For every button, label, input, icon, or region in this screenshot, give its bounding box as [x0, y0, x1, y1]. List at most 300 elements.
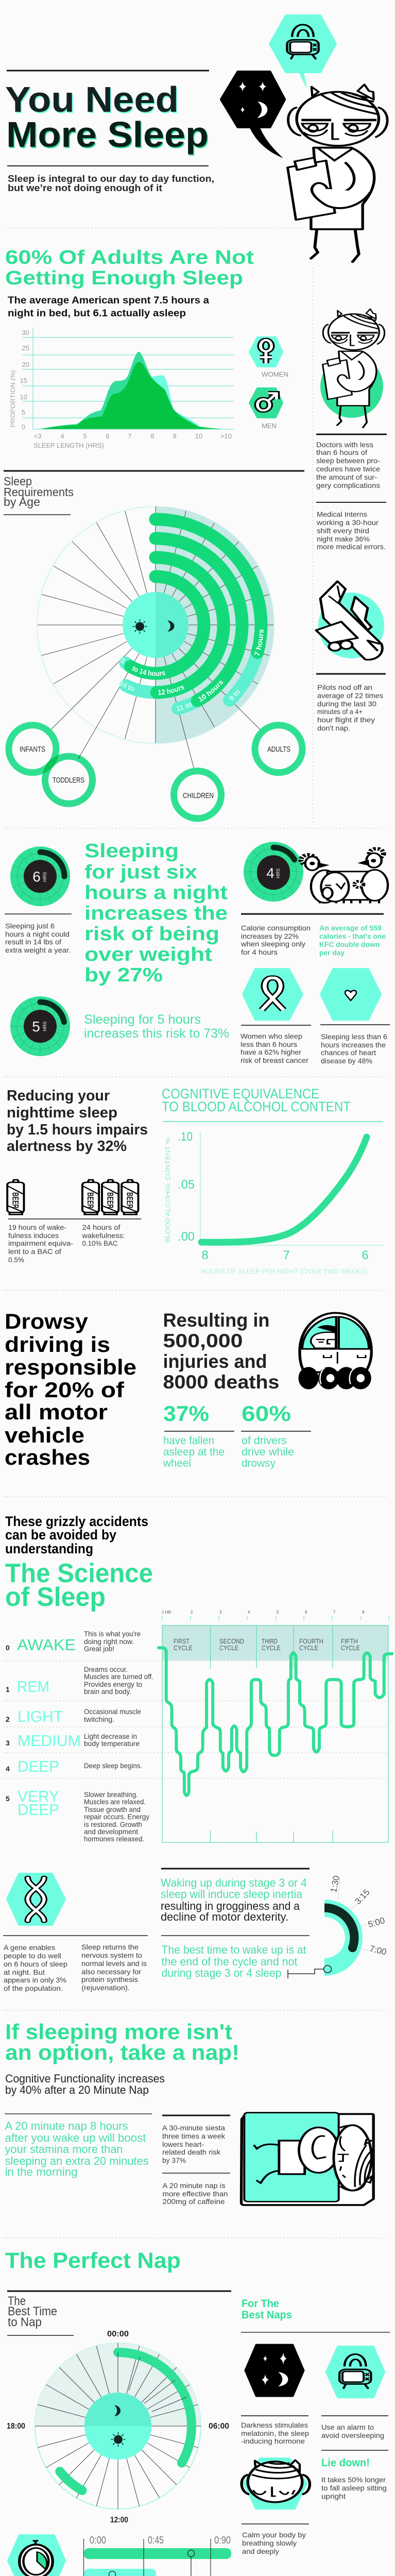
stage: very deep: 5	[6, 1794, 10, 1803]
text: nervous system: nervous system to	[81, 1951, 142, 1959]
bar labels: hours	[117, 630, 264, 711]
text: 20 minute nap stamina: your stamina more than	[5, 2143, 123, 2156]
area chart: sleep length by gender: <3	[34, 432, 41, 440]
stat: 60 percent: drive while	[242, 1446, 294, 1458]
text: 19 hours	[8, 1223, 73, 1264]
heading: drowsy driving: vehicle	[5, 1423, 84, 1447]
age label: infants: INFANTS	[20, 745, 45, 754]
text: 73% risk: increases this risk to 73%	[84, 1026, 229, 1041]
area chart: sleep length by gender: 9	[173, 432, 177, 440]
stage: awake: This is what you're	[84, 1630, 141, 1638]
icon: beer cans	[7, 1180, 138, 1214]
gauge: wake up cycle times: 7:00	[369, 1944, 387, 1957]
chart: nap length timeline: 0:45	[148, 2535, 164, 2546]
icon: beer cans: BEER	[85, 1192, 95, 1209]
text: medical interns	[316, 510, 386, 551]
age label: toddlers	[45, 756, 93, 804]
text: 559 calories: An average of 559	[319, 924, 382, 932]
line chart: blood alcohol content: .00	[178, 1230, 195, 1244]
title: You Need More Sleep	[5, 70, 210, 166]
heading: over weight risk: hours a night	[84, 882, 228, 904]
text: nervous system: protein synthesis	[81, 1975, 138, 1984]
area chart: sleep length by gender: 0	[22, 423, 25, 431]
header panel	[5, 15, 387, 262]
title: science of sleep	[5, 1558, 153, 1612]
area chart: sleep length by gender: 15	[20, 377, 27, 384]
hypnogram chart: FIRST	[174, 1637, 190, 1645]
gauge: 5 hours: 5	[32, 1019, 40, 1035]
text: breast cancer	[241, 1032, 308, 1064]
title: You Need More Sleep: You Need	[5, 79, 179, 120]
heading: drowsy driving: driving is	[5, 1332, 110, 1357]
text: 24 hours: 0.10% BAC	[82, 1239, 117, 1247]
text: calm your body: Calm your body by	[242, 2531, 306, 2539]
text: 73% risk	[84, 1012, 229, 1041]
chart: best time to nap clock: 12:00	[110, 2516, 128, 2524]
stage: light: LIGHT	[18, 1707, 63, 1725]
stat: 60 percent: of drivers	[242, 1435, 287, 1447]
text: caffeine: 200mg of caffeine	[163, 2197, 225, 2206]
text: heart disease: Sleeping less than 6	[321, 1032, 387, 1041]
text: 559 calories: per day	[319, 948, 345, 957]
stage: very deep: and development	[84, 1827, 138, 1836]
text: gene: A gene enables	[4, 1943, 55, 1952]
bar labels: hours: to 14 hours	[132, 666, 165, 676]
text: pilots: don't nap.	[317, 724, 350, 732]
stat: 37 percent: 37%	[163, 1401, 209, 1426]
text: alarm: Use an alarm to	[321, 2423, 374, 2431]
stage: awake	[6, 1630, 141, 1654]
area chart: sleep length by gender: 10	[195, 432, 202, 440]
text: medical interns: working a 30-hour	[316, 518, 379, 527]
text: calorie consumption: when sleeping only	[241, 940, 305, 948]
stage: medium: MEDIUM	[18, 1732, 81, 1750]
area chart: sleep length by gender	[9, 328, 234, 449]
gauge: wake up cycle times: 1:30	[329, 1875, 341, 1893]
title: You Need More Sleep: More Sleep	[7, 115, 210, 156]
heading: drowsy driving: crashes	[5, 1445, 90, 1469]
stage: very deep	[6, 1787, 149, 1843]
hypnogram chart: CYCLE	[262, 1644, 281, 1652]
area chart: sleep length by gender: 30	[22, 329, 29, 336]
hypnogram chart: 4	[248, 1610, 250, 1615]
text: 20 minute nap stamina: after you wake up will boost	[5, 2131, 146, 2144]
panel: 60% of adults	[4, 247, 304, 515]
stage: light: twitching.	[84, 1715, 114, 1723]
icon: car with sleeping driver	[298, 1313, 371, 1389]
text: gene: at night. But	[4, 1968, 45, 1976]
subtitle	[8, 174, 214, 193]
area chart: sleep length by gender: 5	[22, 409, 25, 416]
side column: professions	[316, 309, 387, 732]
text: sleep inertia: decline of motor dexterity.	[161, 1910, 288, 1923]
gauge: 6 hours	[10, 846, 70, 906]
heading: reducing nighttime sleep: nighttime sleep	[7, 1105, 117, 1121]
bar labels: hours: 12 hours	[158, 685, 184, 695]
stage: medium	[6, 1732, 140, 1750]
line chart: blood alcohol content: .10	[178, 1130, 193, 1144]
legend: women: WOMEN	[262, 370, 288, 378]
text: nervous system	[81, 1943, 147, 1992]
age label: infants	[9, 725, 56, 773]
text: 24 hours: wakefulness:	[81, 1231, 125, 1240]
area chart: sleep length by gender: 4	[60, 432, 64, 440]
text: sleep inertia: sleep will induce sleep inertia	[161, 1888, 303, 1901]
text: alarm	[321, 2423, 384, 2439]
hypnogram chart: THIRD	[262, 1637, 278, 1645]
text: calorie consumption: increases by 22%	[241, 932, 299, 940]
stage: REM	[6, 1665, 153, 1696]
text: nervous system: (rejuvenation).	[81, 1984, 130, 1992]
text: lie down: to fall asleep sitting	[321, 2484, 387, 2492]
icon: beer cans: BEER	[125, 1192, 134, 1209]
text: breast cancer: Women who sleep	[241, 1032, 302, 1040]
heading: take a nap	[5, 2020, 239, 2064]
heading: drowsy driving: for 20% of	[5, 1378, 125, 1402]
heading: over weight risk: risk of being	[84, 923, 219, 945]
hypnogram chart: 8	[362, 1610, 365, 1615]
hypnogram chart: 7	[333, 1610, 336, 1615]
hypnogram chart: 1 HR	[162, 1610, 171, 1615]
stage: medium: Light decrease in	[84, 1732, 137, 1740]
text: siesta	[162, 2124, 226, 2164]
stat: 37 percent: asleep at the	[163, 1446, 225, 1458]
area chart: sleep length by gender: SLEEP LENGTH (HRS)	[33, 442, 104, 449]
icon: heart hexagon	[321, 969, 381, 1020]
panel: weight and health	[5, 840, 390, 1065]
heading: drowsy driving: Drowsy	[5, 1309, 89, 1333]
text: 19 hours: impairment equiva-	[8, 1239, 73, 1247]
text: calorie consumption: Calorie consumption	[241, 924, 311, 932]
text: pilots: average of 22 times	[317, 691, 383, 700]
text: 14 lbs: extra weight a year.	[5, 946, 71, 954]
bar labels: hours: 10 hours	[198, 681, 223, 702]
heading: over weight risk: over weight	[84, 944, 212, 965]
illustration: tired doctor character	[287, 84, 387, 262]
area chart: sleep length by gender: 6	[106, 432, 110, 440]
stage: deep: 4	[6, 1765, 10, 1773]
text: injuries and deaths: 500,000	[163, 1330, 243, 1351]
stat: 37 percent: have fallen	[163, 1435, 214, 1447]
stage: awake: AWAKE	[17, 1636, 76, 1654]
text: darkness: -inducing hormone	[241, 2437, 305, 2445]
subheading: average American: The average American spent 7.5 hours a	[8, 295, 209, 306]
chart: nap length timeline: 0:90	[214, 2535, 231, 2546]
stage: awake: Great job!	[84, 1645, 114, 1653]
stage: light	[6, 1707, 141, 1725]
panel: alertness and alcohol	[7, 1086, 383, 1275]
title: science of sleep: The Science	[5, 1558, 153, 1588]
gauge: 5 hours	[10, 996, 70, 1056]
text: gene	[4, 1943, 67, 1992]
hypnogram chart: CYCLE	[219, 1644, 238, 1652]
area chart: sleep length by gender: >10	[220, 432, 232, 440]
text: lie down: upright	[321, 2492, 346, 2500]
stat: 37 percent: wheel	[163, 1458, 191, 1469]
text: 19 hours: 19 hours of wake-	[8, 1223, 66, 1231]
text: heart disease: hours increases the	[321, 1041, 386, 1049]
heading: best time to nap: Best Time	[8, 2304, 57, 2318]
text: sleep inertia: resulting in grogginess and a	[161, 1900, 300, 1912]
text: lie down	[321, 2457, 387, 2500]
panel: science of sleep	[3, 1514, 392, 1992]
heading: over weight risk: by 27%	[84, 964, 163, 986]
text: sleep inertia	[161, 1876, 307, 1923]
icon: night sky speech bubble	[221, 72, 284, 158]
heading: 60% of adults: 60% Of Adults Are Not	[5, 247, 254, 268]
heading: for the best naps	[242, 2298, 292, 2321]
heading: take a nap: an option, take a nap!	[5, 2040, 239, 2064]
heading: sleep requirements by age: by Age	[4, 495, 40, 509]
stat: 37 percent	[163, 1401, 234, 1469]
text: darkness: melatonin, the sleep	[241, 2429, 309, 2437]
icon: beer cans: BEER	[10, 1192, 20, 1209]
heading: reducing nighttime sleep: alertness by 32%	[7, 1138, 127, 1155]
line chart: blood alcohol content	[164, 1130, 383, 1275]
text: alarm: avoid oversleeping	[321, 2431, 384, 2439]
bar labels: hours: 15	[117, 656, 126, 664]
hypnogram chart: FOURTH	[299, 1637, 323, 1645]
line chart: blood alcohol content: .05	[178, 1178, 195, 1192]
gauge: 6 hours: HRS	[42, 872, 47, 882]
icon: airplane	[316, 581, 384, 659]
heading: best time to nap: The	[8, 2294, 26, 2308]
text: pilots	[317, 683, 383, 732]
subheading: average American	[8, 295, 209, 319]
icon: beer cans: BEER	[105, 1192, 114, 1209]
text: injuries and deaths: 8000 deaths	[163, 1371, 279, 1393]
hypnogram chart: SECOND	[219, 1637, 244, 1645]
heading: for the best naps: For The	[242, 2298, 279, 2310]
age label: children: CHILDREN	[183, 791, 214, 800]
illustration: doctor on green circle	[320, 309, 385, 428]
text: 73% risk: Sleeping for 5 hours	[84, 1012, 201, 1027]
text: best time to wake up: during stage 3 or 4 sleep	[162, 1967, 281, 1979]
text: doctors: cedures have twice	[316, 465, 380, 473]
heading: over weight risk: increases the	[84, 903, 228, 924]
stage: REM: Muscles are turned off.	[84, 1672, 153, 1681]
subheading: cognitive functionality	[5, 2072, 165, 2096]
text: doctors: Doctors with less	[316, 440, 373, 449]
hypnogram chart: FIFTH	[341, 1637, 358, 1645]
text: 559 calories	[319, 924, 386, 957]
area chart: sleep length by gender: 8	[150, 432, 154, 440]
chart: nap length timeline	[83, 2535, 231, 2576]
subtitle: but we’re not doing enough of it	[8, 183, 162, 193]
text: caffeine: more effective than	[163, 2190, 228, 2198]
gauge: 5 hours: HRS	[42, 1021, 47, 1031]
panel: take a nap	[5, 2020, 373, 2206]
icon: sleeping face hexagon	[242, 2459, 310, 2509]
heading: sleep requirements by age	[4, 474, 74, 509]
text: 559 calories: KFC double down	[319, 940, 380, 948]
gauge: 4 hours: 4	[266, 865, 274, 881]
text: siesta: A 30-minute siesta	[162, 2124, 225, 2132]
stage: deep: Deep sleep begins.	[84, 1761, 142, 1770]
heading: reducing nighttime sleep: by 1.5 hours impairs	[7, 1122, 148, 1138]
text: gene: people to do well	[4, 1952, 61, 1960]
title: You Need More Sleep: More Sleep	[6, 114, 209, 155]
heading: grizzly accidents	[5, 1514, 148, 1556]
area chart: sleep length by gender: 10	[20, 393, 27, 401]
text: 19 hours: fulness induces	[8, 1231, 59, 1240]
text: 20 minute nap stamina	[5, 2120, 148, 2178]
text: lie down: It takes 50% longer	[321, 2476, 386, 2484]
text: injuries and deaths	[163, 1310, 279, 1393]
bar labels: hours: 9 to	[229, 690, 240, 701]
stage: REM: brain and body.	[84, 1687, 131, 1696]
text: medical interns: night make 36%	[317, 535, 370, 543]
text: gene: of the population.	[4, 1984, 63, 1992]
stage: light: Occasional muscle	[84, 1707, 141, 1716]
text: pilots: during the last 30	[317, 700, 376, 708]
icon: double down chicken sandwich	[301, 849, 388, 903]
text: best time to wake up: the end of the cycle and not	[162, 1955, 298, 1968]
gauge: wake up cycle times	[288, 1875, 387, 1978]
text: heart disease	[321, 1032, 387, 1065]
text: doctors: gery complications	[316, 481, 380, 489]
gauge: 6 hours: 6	[32, 869, 41, 885]
text: 19 hours: lent to a BAC of	[8, 1247, 61, 1256]
text: nervous system: normal levels and is	[81, 1959, 147, 1968]
text: siesta: related death risk	[162, 2148, 221, 2156]
text: 20 minute nap stamina: in the morning	[5, 2165, 77, 2178]
gauge: 4 hours: HRS	[276, 868, 281, 878]
area chart: sleep length by gender: 5	[83, 432, 87, 440]
heading: for the best naps: Best Naps	[242, 2309, 292, 2321]
heading: over weight risk: Sleeping	[84, 840, 179, 862]
stage: very deep: VERY	[18, 1787, 59, 1805]
gauge: 4 hours	[244, 842, 303, 902]
text: gene: appears in only 3%	[4, 1976, 66, 1984]
illustration: person napping in bed	[241, 2113, 373, 2205]
gauge: wake up cycle times: 3:15	[353, 1887, 372, 1906]
hypnogram chart: 6	[305, 1610, 307, 1615]
area chart: sleep length by gender: PROPORTION (%)	[9, 370, 16, 428]
heading: grizzly accidents: can be avoided by	[5, 1527, 116, 1543]
heading: best time to nap: to Nap	[8, 2315, 42, 2329]
hypnogram chart: 5	[277, 1610, 279, 1615]
icon: alarm tv hexagon	[327, 2347, 384, 2397]
hypnogram chart	[4, 1610, 392, 1842]
text: 19 hours: 0.5%	[8, 1256, 24, 1264]
text: injuries and deaths: Resulting in	[163, 1310, 270, 1331]
stage: very deep: hormones released.	[84, 1835, 144, 1843]
hub: day and night	[123, 592, 188, 658]
stage: very deep: Slower breathing.	[84, 1790, 138, 1799]
chart: best time to nap clock: 18:00	[7, 2422, 25, 2431]
chart: sleep requirements radial	[5, 506, 306, 822]
line chart: blood alcohol content: BLOOD ALCOHOL CONTENT %	[164, 1138, 171, 1243]
text: pilots: Pilots nod off an	[317, 683, 372, 691]
text: breast cancer: risk of breast cancer	[241, 1056, 308, 1064]
text: doctors	[316, 440, 380, 489]
line chart: blood alcohol content: 6	[362, 1248, 369, 1262]
panel: perfect nap	[4, 2248, 390, 2576]
panel: drowsy driving	[5, 1309, 371, 1469]
stat: 60 percent	[241, 1401, 311, 1469]
age label: adults	[255, 725, 302, 773]
heading: cognitive equivalence: COGNITIVE EQUIVALENCE	[162, 1086, 319, 1101]
text: pilots: hour flight if they	[317, 716, 375, 724]
subtitle: Sleep is integral to our day to day function,	[8, 174, 214, 184]
heading: sleep requirements by age: Sleep	[4, 474, 32, 488]
text: siesta: by 37%	[162, 2156, 186, 2164]
line chart: blood alcohol content: HOURS OF SLEEP PER NIGHT (OVER TWO WEEKS)	[201, 1267, 367, 1275]
legend: men	[250, 388, 282, 430]
stage: medium: body temperature	[84, 1739, 140, 1748]
text: 24 hours	[81, 1223, 125, 1247]
heading: drowsy driving	[5, 1309, 136, 1469]
legend: men: MEN	[262, 422, 277, 430]
subheading: average American: night in bed, but 6.1 actually asleep	[8, 308, 186, 319]
heading: drowsy driving: all motor	[5, 1400, 108, 1424]
legend: women	[250, 337, 288, 378]
stage: very deep: Muscles are relaxed.	[84, 1798, 146, 1806]
text: calorie consumption	[241, 924, 311, 956]
stage: deep: DEEP	[18, 1757, 59, 1775]
text: gene: on 6 hours of sleep	[4, 1960, 67, 1968]
heading: reducing nighttime sleep	[7, 1088, 148, 1155]
bar labels: hours: 7 hours	[254, 630, 264, 655]
text: siesta: lowers heart-	[162, 2140, 204, 2148]
stat: 60 percent: drowsy	[242, 1458, 276, 1469]
icon: night sky hexagon	[246, 2345, 303, 2396]
heading: 60% of adults	[5, 247, 254, 289]
text: breast cancer: have a 62% higher	[241, 1048, 301, 1056]
chart: nap length timeline: 0:00	[90, 2535, 106, 2546]
area chart: sleep length by gender: 7	[128, 432, 132, 440]
chart: best time to nap clock	[7, 2330, 229, 2524]
stage: very deep: repair occurs. Energy	[84, 1812, 149, 1821]
icon: stopwatch hexagon	[8, 2535, 65, 2576]
stage: REM: REM	[17, 1677, 49, 1696]
stage: deep	[6, 1757, 142, 1775]
line chart: blood alcohol content: 7	[283, 1248, 290, 1262]
text: calm your body: breathing slowly	[242, 2539, 297, 2547]
stat: 60 percent: 60%	[242, 1401, 291, 1426]
text: 20 minute nap stamina: A 20 minute nap 8 hours	[5, 2120, 128, 2132]
hypnogram chart: CYCLE	[299, 1644, 318, 1652]
stage: very deep: Tissue growth and	[84, 1805, 141, 1814]
age label: adults: ADULTS	[267, 745, 290, 754]
title: the perfect nap: The Perfect Nap	[5, 2248, 181, 2273]
text: darkness	[241, 2421, 309, 2445]
title: You Need More Sleep: You Need	[6, 80, 180, 121]
heading: best time to nap	[8, 2294, 57, 2329]
icon: DNA hexagon	[7, 1874, 65, 1925]
heading: grizzly accidents: understanding	[5, 1541, 93, 1556]
stage: awake: 0	[6, 1643, 10, 1652]
stage: very deep: is restored. Growth	[84, 1820, 142, 1828]
heading: sleep requirements by age: Requirements	[4, 485, 74, 499]
text: best time to wake up	[162, 1943, 306, 1979]
heading: reducing nighttime sleep: Reducing your	[7, 1088, 110, 1104]
text: 559 calories: calories - that's one	[319, 932, 386, 940]
title: science of sleep: of Sleep	[5, 1582, 106, 1612]
text: 14 lbs	[5, 922, 71, 954]
heading: grizzly accidents: These grizzly accidents	[5, 1514, 148, 1529]
text: best time to wake up: The best time to wake up is at	[162, 1943, 306, 1956]
text: injuries and deaths: injuries and	[163, 1351, 267, 1372]
chart: best time to nap clock: 00:00	[107, 2330, 129, 2338]
text: 14 lbs: hours a night could	[5, 930, 70, 938]
text: medical interns: shift every third	[317, 527, 369, 535]
heading: cognitive equivalence: TO BLOOD ALCOHOL CONTENT	[162, 1099, 351, 1114]
text: darkness: Darkness stimulates	[241, 2421, 308, 2429]
text: 20 minute nap stamina: sleeping an extra 20 minutes	[5, 2155, 148, 2167]
text: doctors: the amount of sur-	[316, 473, 377, 481]
